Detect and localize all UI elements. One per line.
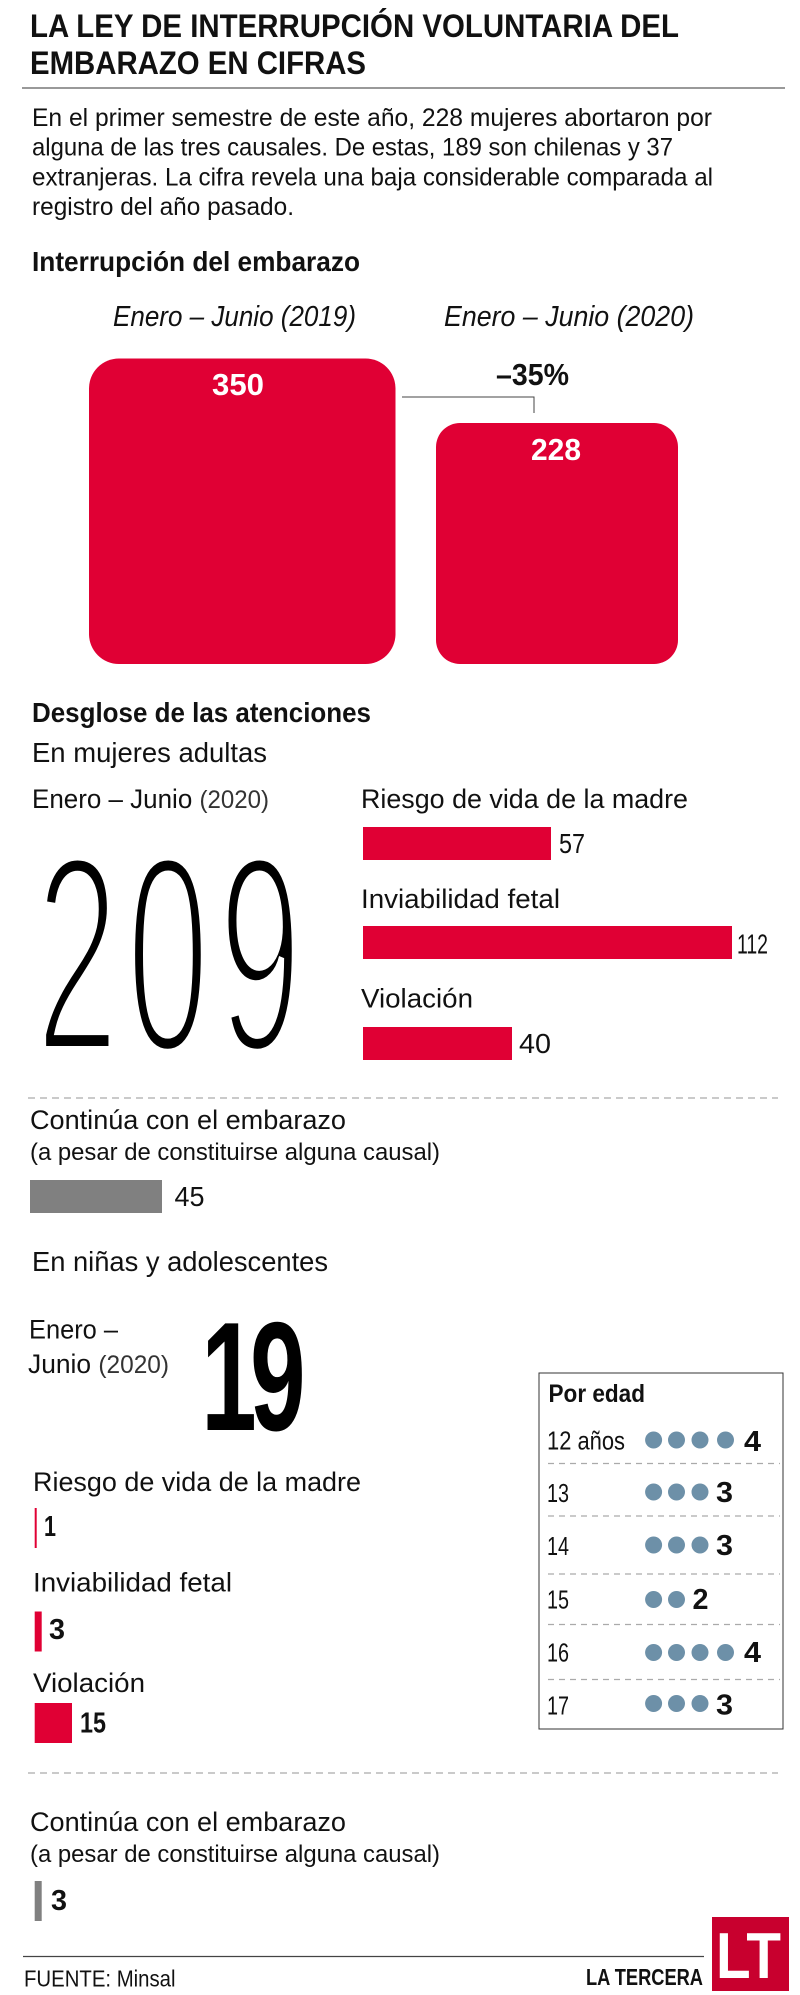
heading: por edad: Por edad: [548, 1380, 645, 1408]
value: 40: 40: [519, 1028, 551, 1059]
value: 350: 350: [212, 367, 264, 402]
row: 16: 4: [744, 1637, 761, 1669]
panel: adult bar chart: [361, 784, 768, 1060]
subheading: mujeres adultas: En mujeres adultas: [32, 737, 267, 768]
bar: 350: [89, 358, 396, 664]
row: 12 años: 12 años: [547, 1426, 625, 1456]
value: 3: 3: [49, 1614, 65, 1646]
period label: [28, 1314, 169, 1379]
intro text block: alguna de las tres causales. De estas, 189 son chilenas y 37: [32, 134, 673, 162]
value: 57: 57: [559, 828, 585, 859]
bar: 228: [436, 423, 678, 664]
panel: por edad: [539, 1373, 783, 1729]
bar: 3: [35, 1612, 42, 1652]
intro text block: extranjeras. La cifra revela una baja considerable comparada al: [32, 164, 713, 192]
row: 12 años: [547, 1426, 761, 1458]
row: 17: 17: [547, 1690, 569, 1720]
row: 16: 16: [547, 1638, 569, 1668]
intro text block: En el primer semestre de este año, 228 mujeres abortaron por: [32, 104, 712, 132]
label: violación: Violación: [361, 984, 473, 1014]
bar: 15: [35, 1703, 72, 1743]
row: 13: 3: [716, 1477, 733, 1509]
brand name: LA TERCERA: [586, 1964, 703, 1990]
change: -35%: –35%: [496, 357, 569, 392]
label: inviabilidad: Inviabilidad fetal: [33, 1568, 232, 1598]
bar: 3: [35, 1881, 42, 1921]
bar: 57: [363, 827, 551, 860]
value: 3: 3: [51, 1885, 67, 1917]
period label: Junio (2020): [28, 1349, 169, 1379]
bar: 45: [30, 1180, 162, 1213]
heading: desglose: Desglose de las atenciones: [32, 697, 371, 728]
row: 17: [547, 1690, 733, 1722]
label: continúa: Continúa con el embarazo: [30, 1807, 346, 1837]
row: 12 años: 4: [744, 1426, 761, 1458]
label: continúa: Continúa con el embarazo: [30, 1105, 346, 1135]
row: 16: [547, 1637, 761, 1669]
row: 15: [547, 1584, 708, 1616]
bar: 40: [363, 1027, 512, 1060]
source: FUENTE: Minsal: [24, 1966, 176, 1992]
label: riesgo: Riesgo de vida de la madre: [361, 784, 688, 814]
row: 15: 15: [547, 1584, 569, 1614]
note: (a pesar de constituirse alguna causal): [30, 1841, 440, 1868]
period label: Enero –: [29, 1314, 118, 1344]
row: 15: 2: [692, 1584, 708, 1616]
heading: interrupción del embarazo: Interrupción del embarazo: [32, 246, 360, 277]
title: [30, 8, 679, 81]
panel: adult continues pregnancy: [30, 1105, 440, 1213]
bar: 112: [363, 926, 732, 959]
value: 1: 1: [44, 1511, 56, 1543]
row: 13: 13: [547, 1478, 569, 1508]
value: 45: 45: [174, 1181, 204, 1212]
value: 228: 228: [531, 432, 581, 467]
subheading: niñas y adolescentes: En niñas y adolescentes: [32, 1246, 328, 1277]
big number: 209: 209: [36, 799, 301, 1111]
row: 14: [547, 1530, 733, 1562]
box: [539, 1373, 783, 1729]
note: (a pesar de constituirse alguna causal): [30, 1139, 440, 1166]
bar: 1: [35, 1508, 37, 1548]
title: EMBARAZO EN CIFRAS: [30, 45, 366, 81]
row: 14: 14: [547, 1531, 569, 1561]
label: riesgo: Riesgo de vida de la madre: [33, 1467, 361, 1497]
connector arrow: [402, 397, 534, 413]
intro text block: [32, 104, 713, 221]
row: 13: [547, 1477, 733, 1509]
logo: LT: [716, 1919, 781, 1992]
value: 15: 15: [80, 1708, 106, 1740]
value: 112: 112: [737, 928, 768, 960]
intro text block: registro del año pasado.: [32, 193, 294, 221]
label: violación: Violación: [33, 1668, 145, 1698]
row: 14: 3: [716, 1530, 733, 1562]
panel: minors continue pregnancy: [30, 1807, 440, 1921]
title: LA LEY DE INTERRUPCIÓN VOLUNTARIA DEL: [30, 8, 679, 44]
period label: Enero – Junio (2020): [32, 784, 269, 814]
big number: 19: 19: [201, 1290, 306, 1463]
label: 2020: Enero – Junio (2020): [444, 301, 694, 333]
row: 17: 3: [716, 1690, 733, 1722]
panel: minors bars: [33, 1467, 361, 1743]
label: inviabilidad: Inviabilidad fetal: [361, 884, 560, 914]
label: 2019: Enero – Junio (2019): [113, 301, 356, 333]
panel: comparison 2019 vs 2020: [89, 301, 694, 664]
